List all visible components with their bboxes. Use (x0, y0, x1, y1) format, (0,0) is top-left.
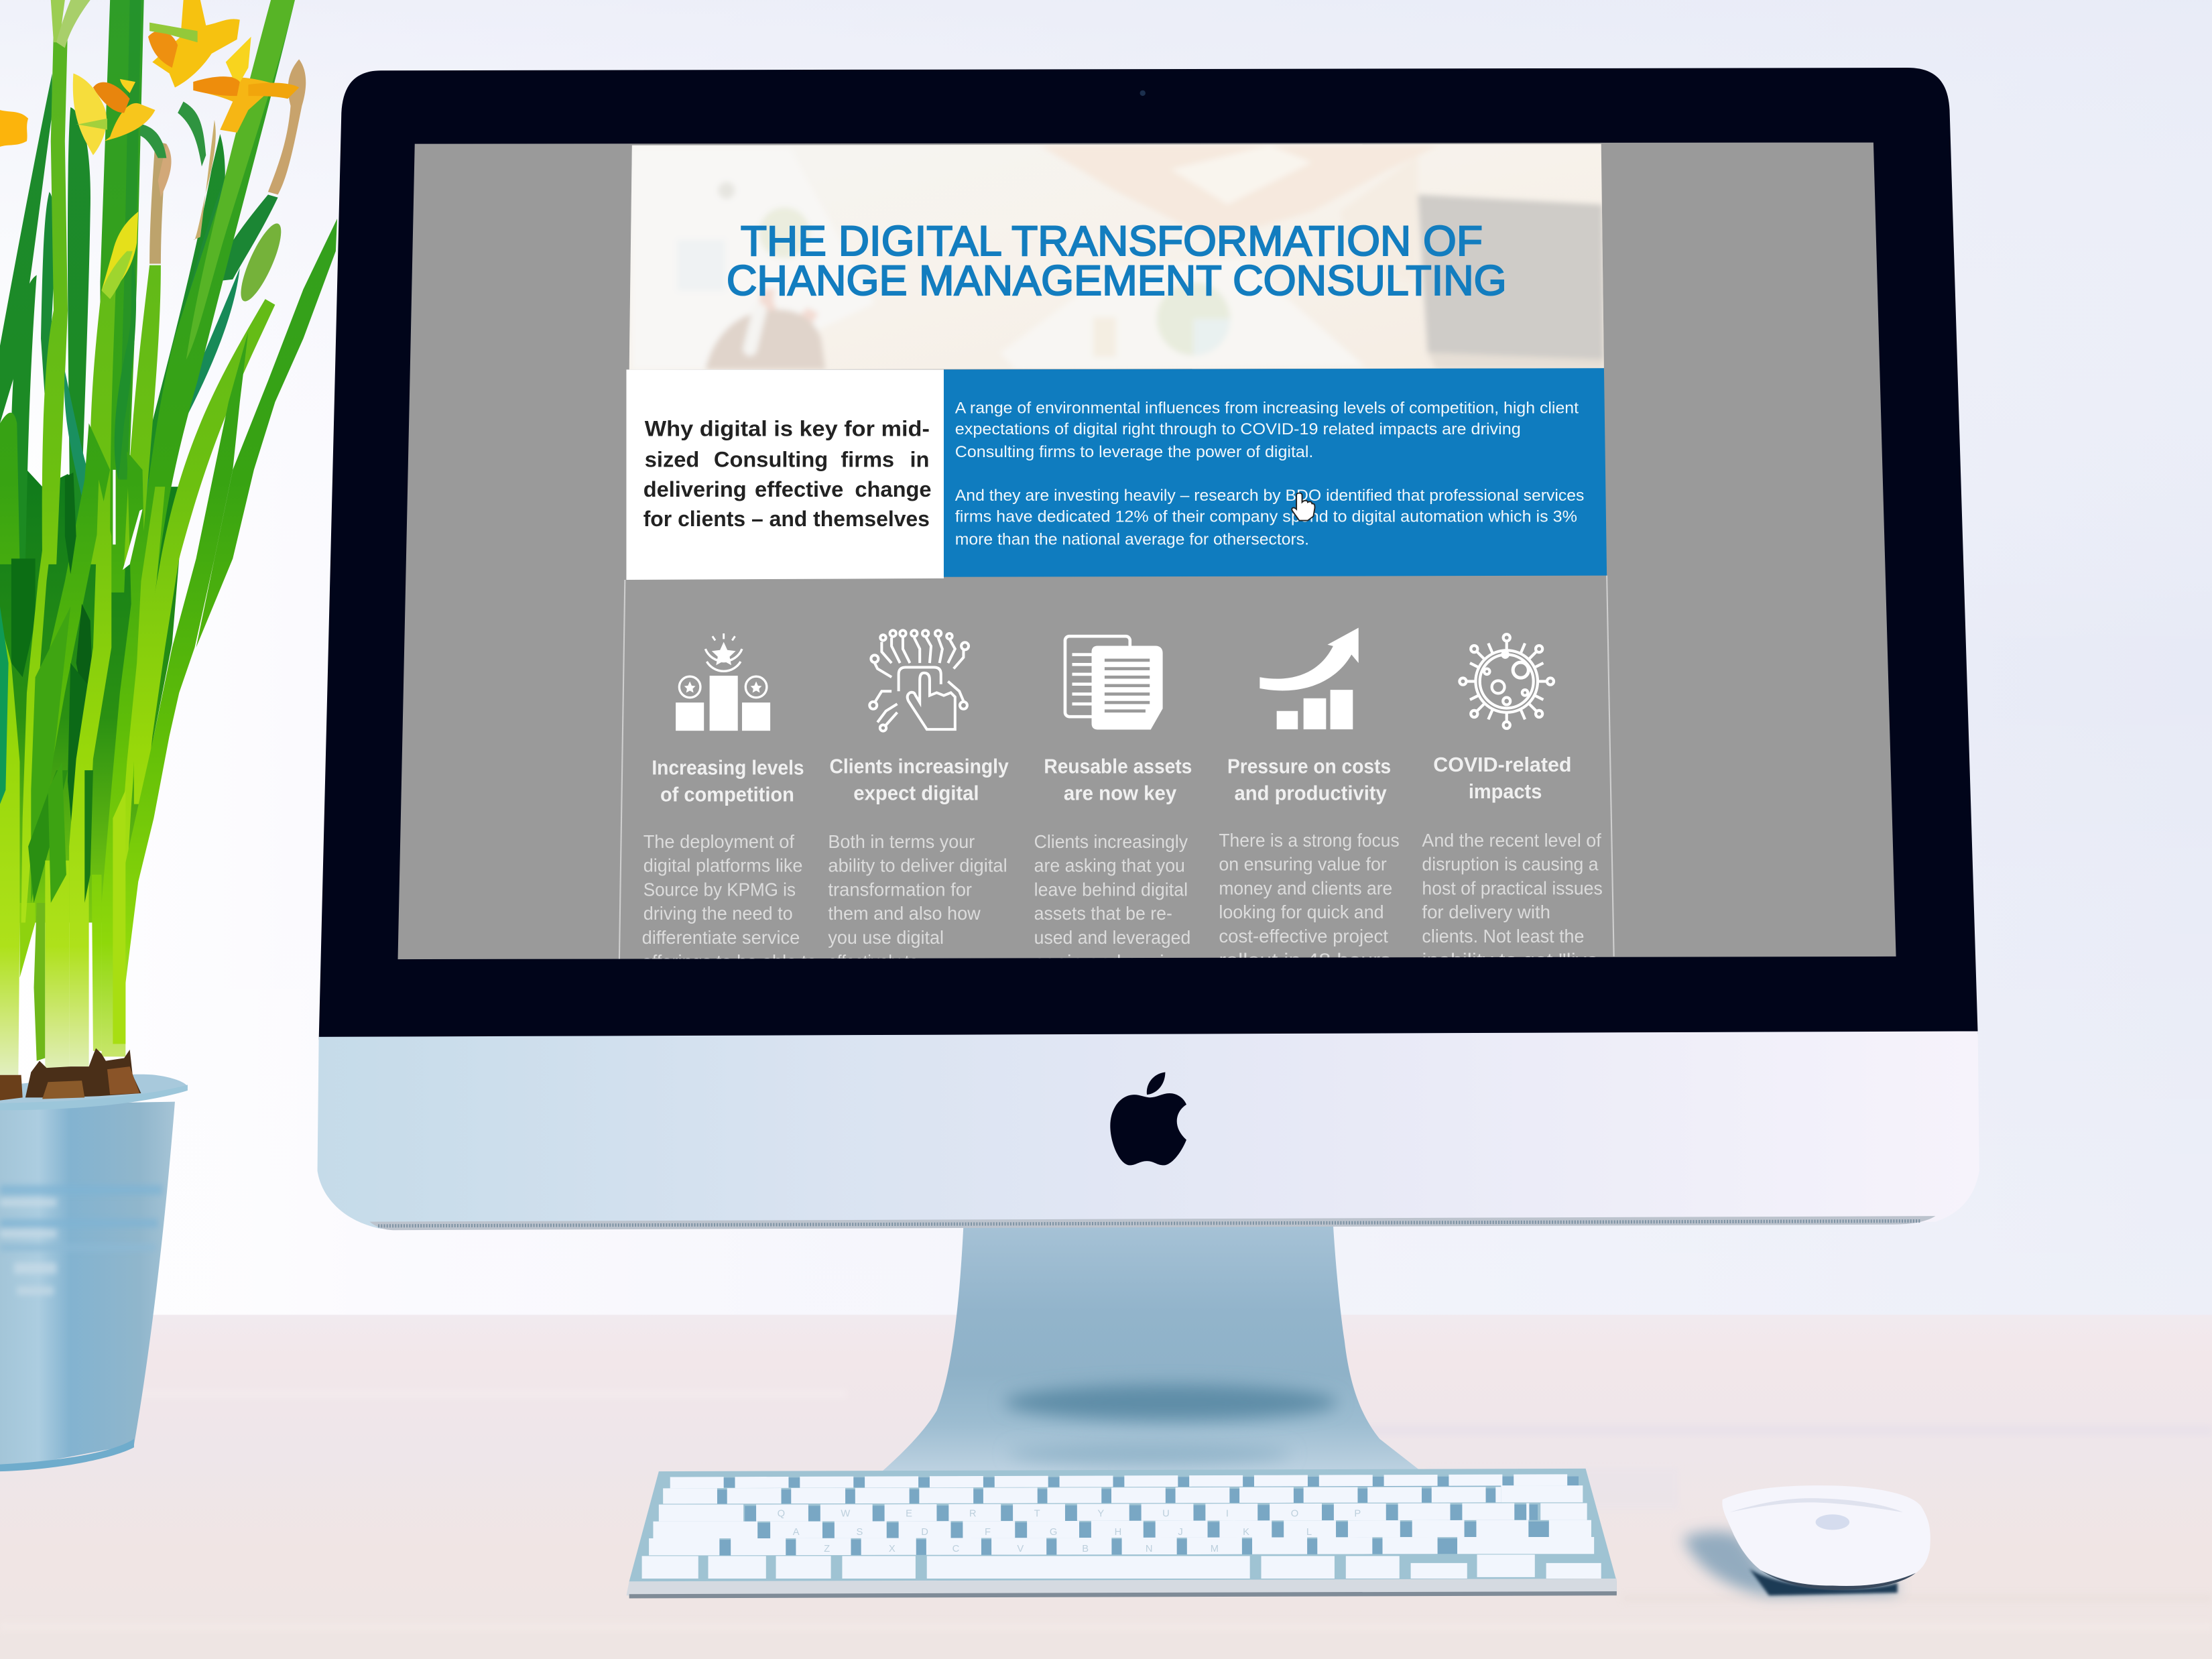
intro heading: for clients – and themselves (643, 506, 930, 531)
heading: are now key (1064, 782, 1176, 804)
hand cursor (1292, 493, 1314, 521)
body text (1422, 830, 1603, 971)
intro paragraph text (955, 400, 1584, 548)
body text: inability to get "live (1422, 950, 1599, 971)
intro paragraph text: And they are investing heavily – research by BDO identified that professional services (955, 487, 1584, 505)
body text: effectively to (828, 951, 918, 972)
body text: you use digital (828, 927, 944, 948)
body text: The deployment of (643, 831, 794, 852)
body text: are asking that you (1034, 855, 1185, 876)
key legends: QWERTYUIOP (778, 1508, 1361, 1519)
intro heading: firms (841, 447, 894, 472)
mouse (1683, 1485, 1930, 1595)
page side rules (619, 576, 1614, 959)
body text: again and again (1034, 951, 1175, 972)
column 1: competition (642, 633, 817, 972)
body text: And the recent level of (1422, 830, 1601, 851)
heading: and productivity (1235, 782, 1387, 804)
flower two (73, 73, 107, 156)
heading: Clients increasingly (830, 755, 1009, 778)
flower four (193, 77, 276, 133)
blue intro panel (944, 368, 1607, 577)
monitor chin (318, 1031, 1979, 1230)
intro heading (643, 416, 932, 531)
heading: COVID-related (1433, 753, 1572, 776)
body text: Clients increasingly (1034, 831, 1188, 852)
body text (642, 835, 814, 959)
pot rim (0, 1085, 188, 1110)
body text: driving the need to (643, 903, 793, 924)
body text: rollout in 48 hours (1219, 950, 1391, 971)
body text: Both in terms your (828, 831, 975, 852)
column 3: reusable assets (1034, 636, 1192, 972)
body text: Source by KPMG is (643, 879, 796, 900)
body text: ability to deliver digital (828, 855, 1007, 876)
plant bulbs (0, 1048, 141, 1101)
icon: documents (1065, 636, 1161, 728)
column 2: clients expect digital (828, 630, 1009, 972)
column 4: costs and productivity (1219, 628, 1400, 971)
body text: transformation for (828, 879, 972, 900)
header title: CHANGE MANAGEMENT CONSULTING (727, 257, 1507, 304)
body text: for delivery with (1422, 902, 1550, 922)
heading (830, 755, 1009, 804)
heading (1227, 755, 1391, 804)
flower at far left (0, 110, 28, 147)
plant: daffodil leaves and flowers (0, 0, 337, 1075)
heading: of competition (660, 783, 794, 806)
dried bud (268, 59, 306, 194)
body text (1034, 831, 1190, 972)
flower three (152, 0, 240, 87)
body text: them and also how (828, 903, 981, 924)
intro paragraph text: Consulting firms to leverage the power of digital. (955, 443, 1313, 461)
plant pot (0, 1074, 188, 1471)
white intro panel (626, 369, 944, 580)
body text: used and leveraged (1034, 927, 1190, 948)
intro heading: in (910, 447, 929, 472)
header title (728, 225, 1504, 296)
icon: podium (676, 633, 770, 731)
key legends (778, 1508, 1361, 1554)
intro heading: effective (755, 477, 843, 501)
intro heading: change (855, 477, 932, 501)
intro heading: delivering (643, 477, 747, 501)
heading (1433, 753, 1572, 803)
monitor bezel (319, 68, 1978, 1040)
body text (1219, 830, 1400, 971)
body text: looking for quick and (1219, 902, 1384, 922)
leaf mass (0, 469, 194, 922)
key legends: ASDFGHJKL (793, 1527, 1312, 1538)
heading: Increasing levels (652, 756, 804, 779)
apple logo (1110, 1072, 1186, 1165)
intro heading: Why digital is key for mid- (645, 416, 930, 440)
body text: differentiate service (642, 927, 800, 948)
icon: rising arrow and bars (1259, 628, 1359, 729)
body text: assets that be re- (1034, 903, 1172, 924)
body text: cost-effective project (1219, 926, 1388, 946)
screen content: infographic page (619, 141, 1615, 972)
heading: Reusable assets (1044, 755, 1192, 778)
intro paragraph text: expectations of digital right through to COVID-19 related impacts are driving (955, 420, 1521, 438)
icon: virus (1459, 634, 1554, 729)
body text: clients. Not least the (1422, 926, 1584, 946)
intro paragraph text: A range of environmental influences from increasing levels of competition, high client (955, 400, 1579, 418)
body text: There is a strong focus (1219, 830, 1400, 851)
header title: THE DIGITAL TRANSFORMATION OF (741, 218, 1483, 265)
heading: Pressure on costs (1227, 755, 1391, 778)
leaf strips (0, 219, 337, 1075)
body text: on ensuring value for (1219, 854, 1387, 875)
intro paragraph text: more than the national average for othersectors. (955, 530, 1309, 548)
column 5: COVID impacts (1422, 634, 1603, 971)
monitor stand (879, 1225, 1425, 1474)
background wall (0, 0, 2212, 1319)
body text (828, 835, 1006, 959)
body text: digital platforms like (643, 855, 803, 876)
screen background (397, 143, 1896, 959)
body text: host of practical issues (1422, 877, 1603, 898)
webcam (1140, 90, 1146, 96)
intro heading: Consulting (714, 447, 828, 472)
keys (642, 1480, 1601, 1571)
body text: leave behind digital (1034, 879, 1188, 900)
key legends: ZXCVBNM (824, 1544, 1219, 1554)
intro heading: sized (645, 447, 699, 472)
body text: disruption is causing a (1422, 854, 1599, 875)
mouse logo (1816, 1514, 1849, 1530)
heading (1044, 755, 1192, 804)
body text: offerings to be able to (642, 951, 817, 972)
keyboard (626, 1469, 1617, 1599)
icon: circuit hand (869, 630, 969, 731)
heading: expect digital (853, 782, 979, 804)
wooden table (0, 1314, 2212, 1659)
intro paragraph text: firms have dedicated 12% of their company spend to digital automation which is 3% (955, 508, 1577, 526)
body text: money and clients are (1219, 877, 1392, 898)
heading (652, 756, 804, 806)
key slots (664, 1481, 1579, 1548)
header banner photo (621, 141, 1615, 374)
heading: impacts (1469, 780, 1542, 803)
